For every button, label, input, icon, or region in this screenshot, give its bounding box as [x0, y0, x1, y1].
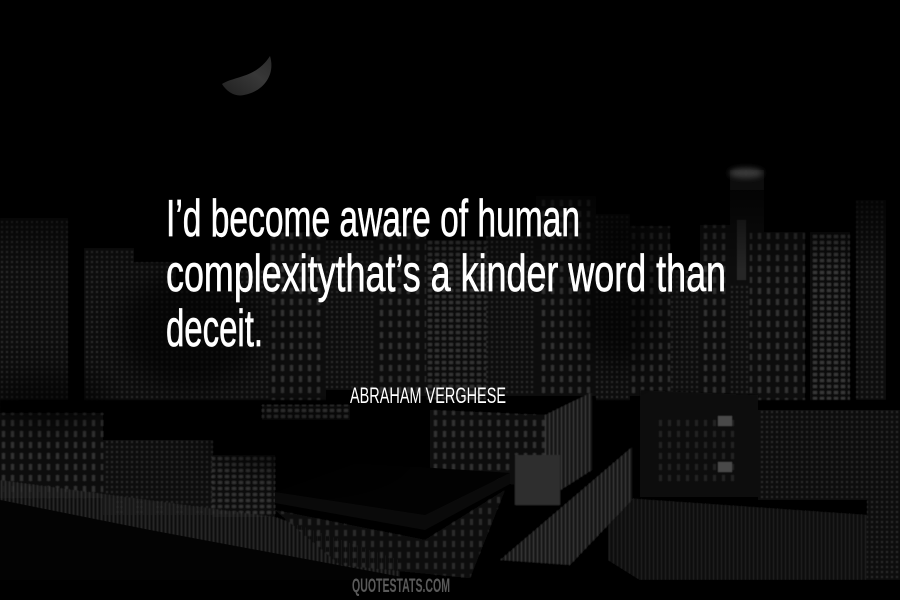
- water and foreground: [0, 500, 900, 600]
- source watermark: QUOTESTATS.COM: [352, 576, 450, 597]
- dark rooftop block: [275, 463, 510, 530]
- quote line 1: I’d become aware of human: [166, 190, 580, 248]
- icon: crescent moon: [222, 56, 271, 95]
- skyline fade: [0, 190, 900, 270]
- shadow blotches: [0, 210, 660, 470]
- author name: ABRAHAM VERGHESE: [350, 383, 506, 408]
- quote line 3: deceit.: [166, 300, 263, 358]
- lower city blocks: [0, 390, 900, 580]
- tower top glow: [729, 168, 763, 178]
- quote text: [166, 190, 726, 358]
- city skyline: [0, 170, 886, 418]
